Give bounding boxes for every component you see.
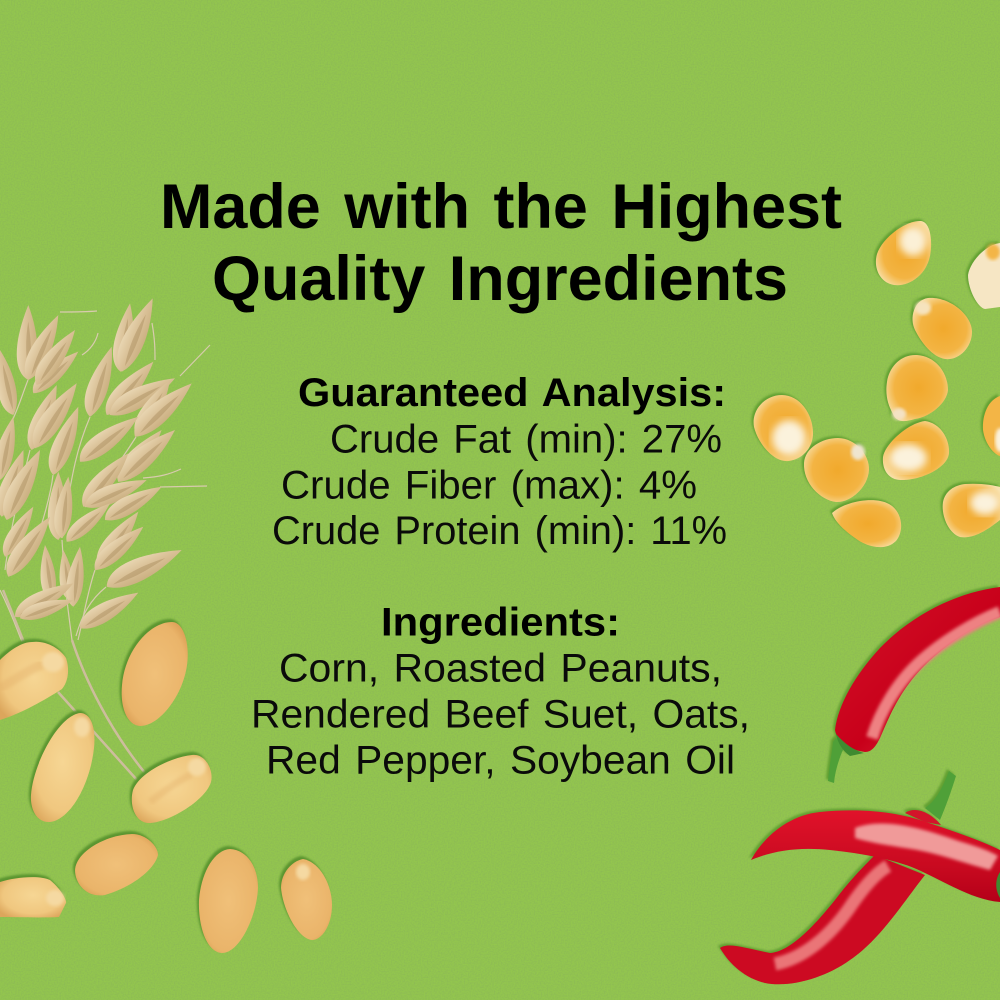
back pod shoulder [905,810,941,825]
kernel 2 [968,243,1000,309]
illustration: corn kernels [754,221,1000,547]
guaranteed analysis text: Guaranteed Analysis: [298,371,726,415]
guaranteed analysis text: Crude Protein (min): 11% [272,509,727,553]
guaranteed analysis text [272,371,727,553]
guaranteed analysis text: Crude Fat (min): 27% [330,418,722,462]
peanut 2 [122,622,188,726]
title [160,172,842,314]
illustration: oat sprig [0,294,210,780]
stem [828,738,843,783]
kernel 3 [913,298,972,359]
kernel 10 [983,396,1000,456]
front pod highlight [855,823,998,870]
ingredients text: Corn, Roasted Peanuts, [279,646,722,690]
ingredients text [251,600,750,782]
back pod [720,855,925,984]
front pod end [996,872,1000,898]
peanut 1 [0,642,68,720]
pod [835,587,1000,752]
guaranteed analysis text: Crude Fiber (max): 4% [281,464,697,508]
kernel 5 [883,421,949,480]
title: Made with the Highest [160,172,842,242]
peanut 7 [199,849,258,953]
peanut 4 [132,755,212,823]
peanut 5 [75,834,158,895]
illustration: red chilies crossed [720,771,1000,984]
peanut 6 [0,877,66,917]
highlight [872,612,1000,738]
kernel 4 [886,355,948,421]
kernel 8 [832,500,901,547]
ingredients text: Red Pepper, Soybean Oil [266,738,735,782]
calyx [836,734,864,756]
ingredients text: Ingredients: [381,600,620,644]
back pod highlight [775,866,888,964]
stem [925,771,956,820]
title: Quality Ingredients [212,244,788,314]
peanut 3 [31,713,94,822]
front pod [751,810,1000,902]
kernel 9 [943,484,1000,537]
kernel 6 [754,395,813,461]
illustration: red chili top [828,587,1000,783]
peanut 8 [281,859,332,940]
kernel 1 [876,221,931,285]
ingredients text: Rendered Beef Suet, Oats, [251,692,750,736]
illustration: peanuts [0,622,332,953]
kernel 7 [804,438,869,502]
